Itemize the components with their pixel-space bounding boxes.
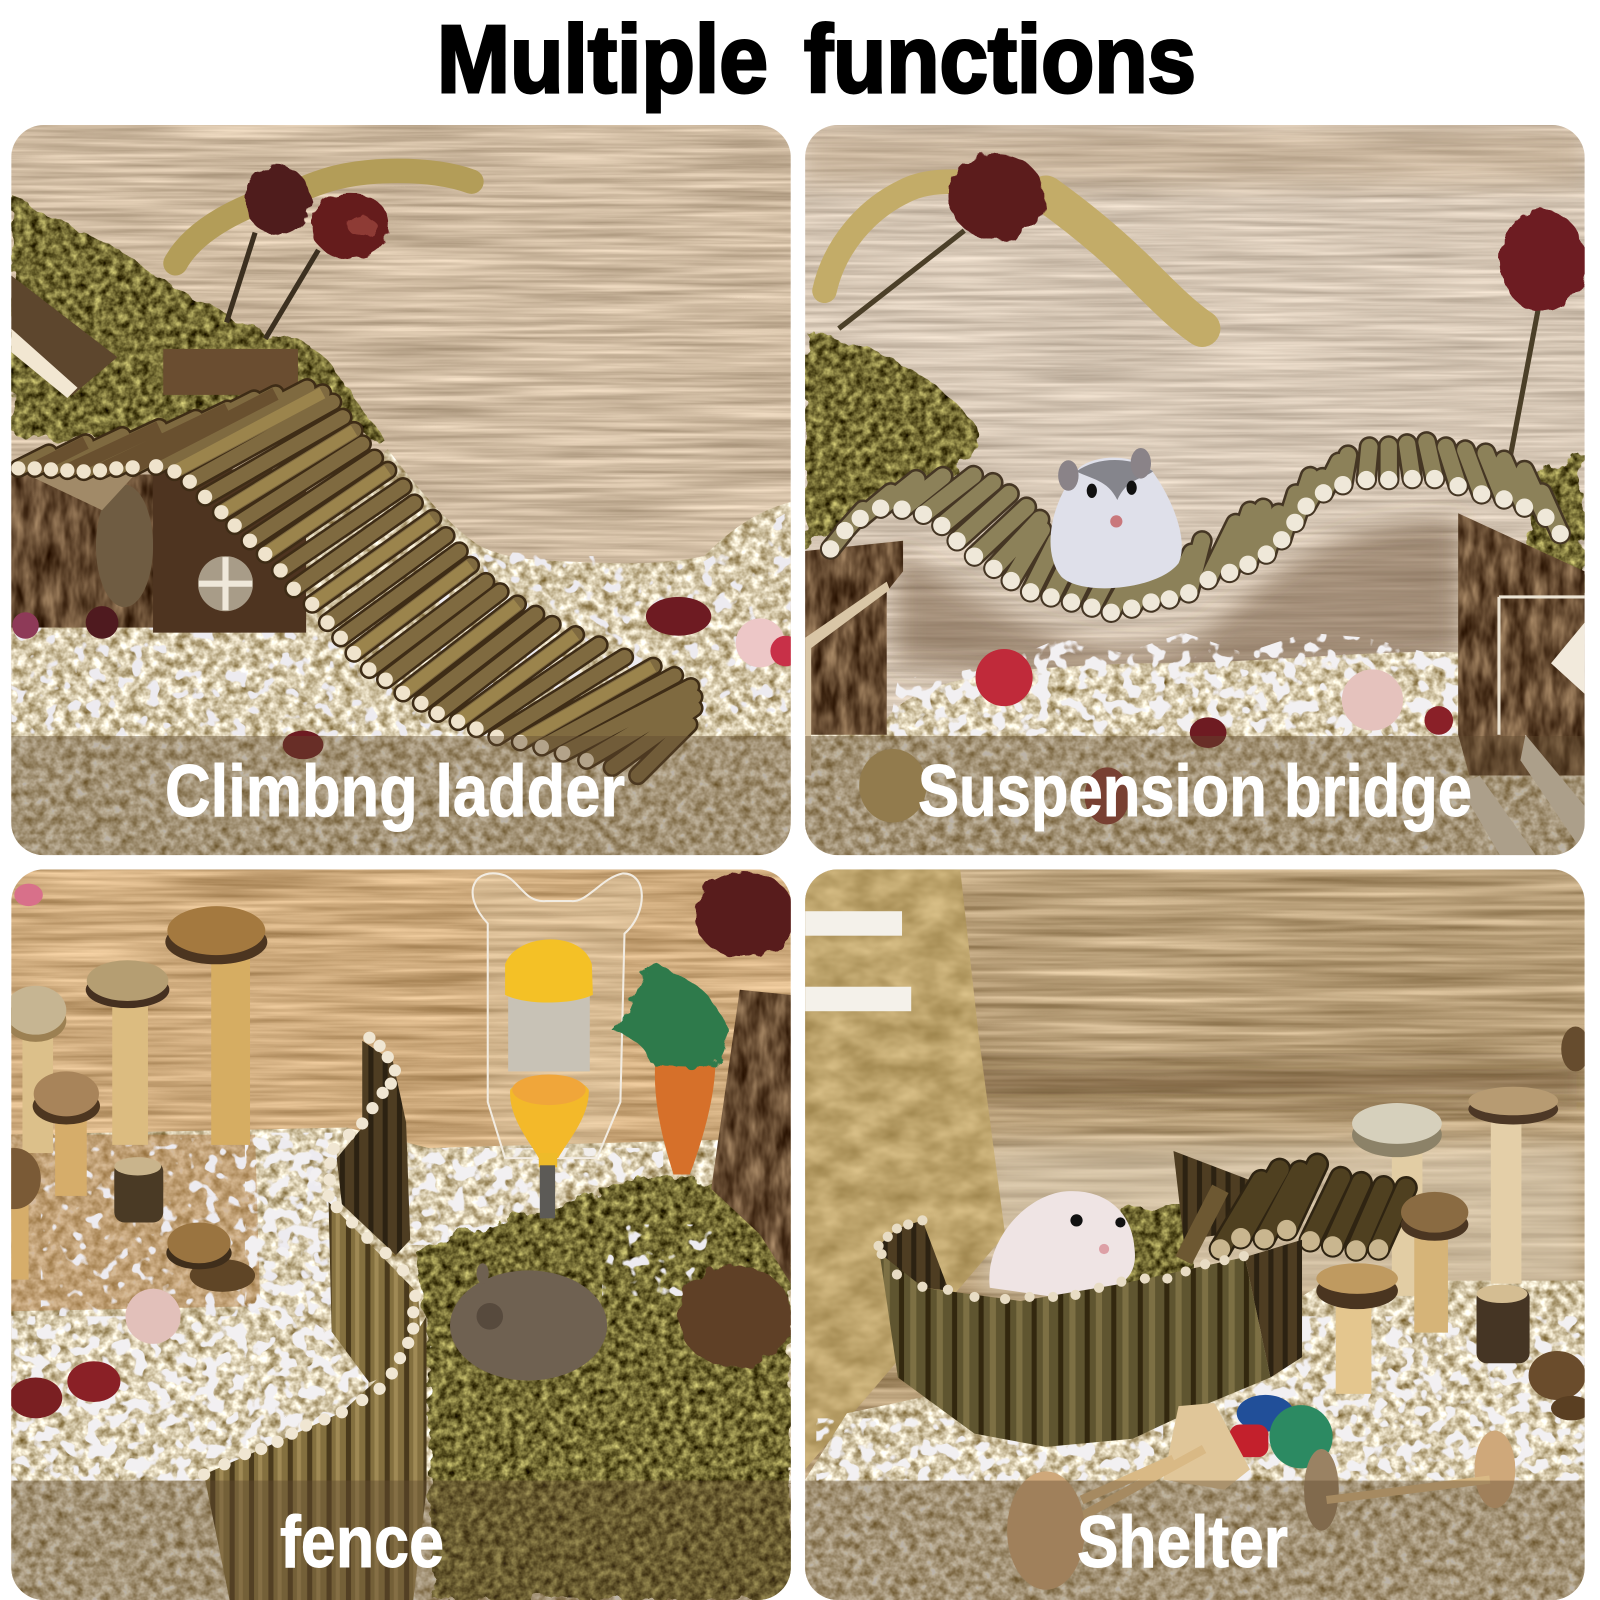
panel: fence xyxy=(0,869,796,1600)
right box xyxy=(1458,513,1585,776)
stool back right xyxy=(1468,1087,1558,1284)
side wall xyxy=(805,869,1005,1469)
paper lower xyxy=(11,1316,368,1481)
stool left xyxy=(5,986,66,1153)
floor board xyxy=(11,1135,260,1311)
woven balls xyxy=(1230,1395,1333,1468)
label: shelter: Shelter xyxy=(1077,1502,1288,1583)
bedding floor xyxy=(11,1128,791,1600)
icon: dried roses xyxy=(949,154,1586,312)
board shavings xyxy=(41,1138,337,1316)
stool back left xyxy=(1352,1103,1442,1296)
hamster xyxy=(1051,448,1182,588)
title: functions xyxy=(804,6,1196,113)
stool cut-off left xyxy=(0,1148,41,1280)
panel: climbing ladder xyxy=(11,124,801,855)
petal top left xyxy=(14,884,43,906)
wooden wheel toy xyxy=(1007,1403,1515,1590)
title xyxy=(437,6,1196,113)
moss right xyxy=(1520,449,1585,592)
paper scraps xyxy=(1224,1316,1585,1481)
bedding floor xyxy=(11,449,791,855)
fence front segment xyxy=(204,1316,427,1600)
fence back segment xyxy=(337,1041,410,1255)
rear ladder xyxy=(1184,1164,1406,1260)
dark wall band xyxy=(959,1061,1585,1102)
pale wall band xyxy=(980,1143,1585,1296)
ladder stick ends xyxy=(18,466,587,760)
bedding floor xyxy=(805,652,1469,855)
stool mid xyxy=(1401,1192,1468,1333)
hut roof xyxy=(11,276,117,398)
hamster xyxy=(989,1191,1135,1298)
stool tall xyxy=(165,906,267,1145)
woven balls xyxy=(859,649,1453,824)
hamster xyxy=(450,1263,607,1381)
floor under band xyxy=(805,733,1585,855)
stool medium xyxy=(86,960,169,1145)
label: climbing ladder: Climbng ladder xyxy=(165,751,625,832)
panel: suspension bridge xyxy=(805,124,1586,855)
label: fence: fence xyxy=(280,1502,444,1583)
stool front xyxy=(1316,1263,1398,1394)
rose stems xyxy=(839,231,1539,457)
white planks xyxy=(1459,735,1585,855)
bridge stick ends xyxy=(831,479,1560,612)
moss behind hamster xyxy=(1122,1209,1194,1291)
paper scraps xyxy=(11,510,791,736)
rose stems xyxy=(227,233,318,339)
right back fence xyxy=(1245,1240,1302,1378)
back wall wood xyxy=(805,869,1585,1600)
wood background xyxy=(805,124,1585,855)
shadow below bridge xyxy=(898,520,1459,682)
stool small xyxy=(33,1071,100,1196)
label: suspension bridge: Suspension bridge xyxy=(918,751,1472,832)
hut bodies xyxy=(11,469,306,633)
icon: dried roses xyxy=(245,165,390,258)
carrot toy xyxy=(612,964,727,1174)
acrylic bottle holder xyxy=(473,873,642,1158)
caption band xyxy=(11,1481,791,1600)
panel: shelter xyxy=(805,869,1592,1600)
paper upper xyxy=(408,1148,663,1245)
millet spray xyxy=(176,171,471,263)
pine cone xyxy=(678,1265,792,1367)
rear fence xyxy=(1173,1151,1259,1240)
water bottle xyxy=(505,939,593,1218)
petals and balls xyxy=(12,597,801,759)
left box xyxy=(805,541,903,776)
bedding floor xyxy=(805,1281,1585,1600)
stump behind ladder xyxy=(163,349,298,395)
caption band xyxy=(805,736,1585,855)
stumps right xyxy=(1529,1027,1592,1420)
white shelves xyxy=(805,911,911,1011)
moss xyxy=(805,332,980,551)
fence stick ends xyxy=(204,1038,415,1474)
front fence xyxy=(880,1253,1270,1447)
fence stick ends xyxy=(879,1220,1244,1299)
caption band xyxy=(11,736,791,855)
hut window xyxy=(198,556,253,611)
bridge sticks xyxy=(831,442,1560,612)
stump xyxy=(1477,1285,1530,1363)
icon: rose xyxy=(694,872,796,958)
paper scraps left xyxy=(816,1418,1163,1481)
paper scraps xyxy=(888,633,1469,736)
title: Multiple xyxy=(437,6,768,113)
top wood tone xyxy=(805,124,1585,186)
petals and ball xyxy=(9,1289,181,1418)
stumps xyxy=(114,1157,255,1292)
wood background xyxy=(11,869,791,1600)
ladder sticks xyxy=(18,388,694,776)
left fold of fence xyxy=(879,1220,949,1291)
fence side segment xyxy=(329,1202,427,1480)
paper on moss xyxy=(602,1224,714,1296)
moss floor xyxy=(413,1173,791,1600)
caption band xyxy=(805,1481,1585,1600)
moss xyxy=(11,194,383,439)
millet spray xyxy=(824,182,1202,329)
bark post xyxy=(711,990,791,1284)
wood background xyxy=(11,124,791,855)
paper near fence xyxy=(245,1133,337,1367)
